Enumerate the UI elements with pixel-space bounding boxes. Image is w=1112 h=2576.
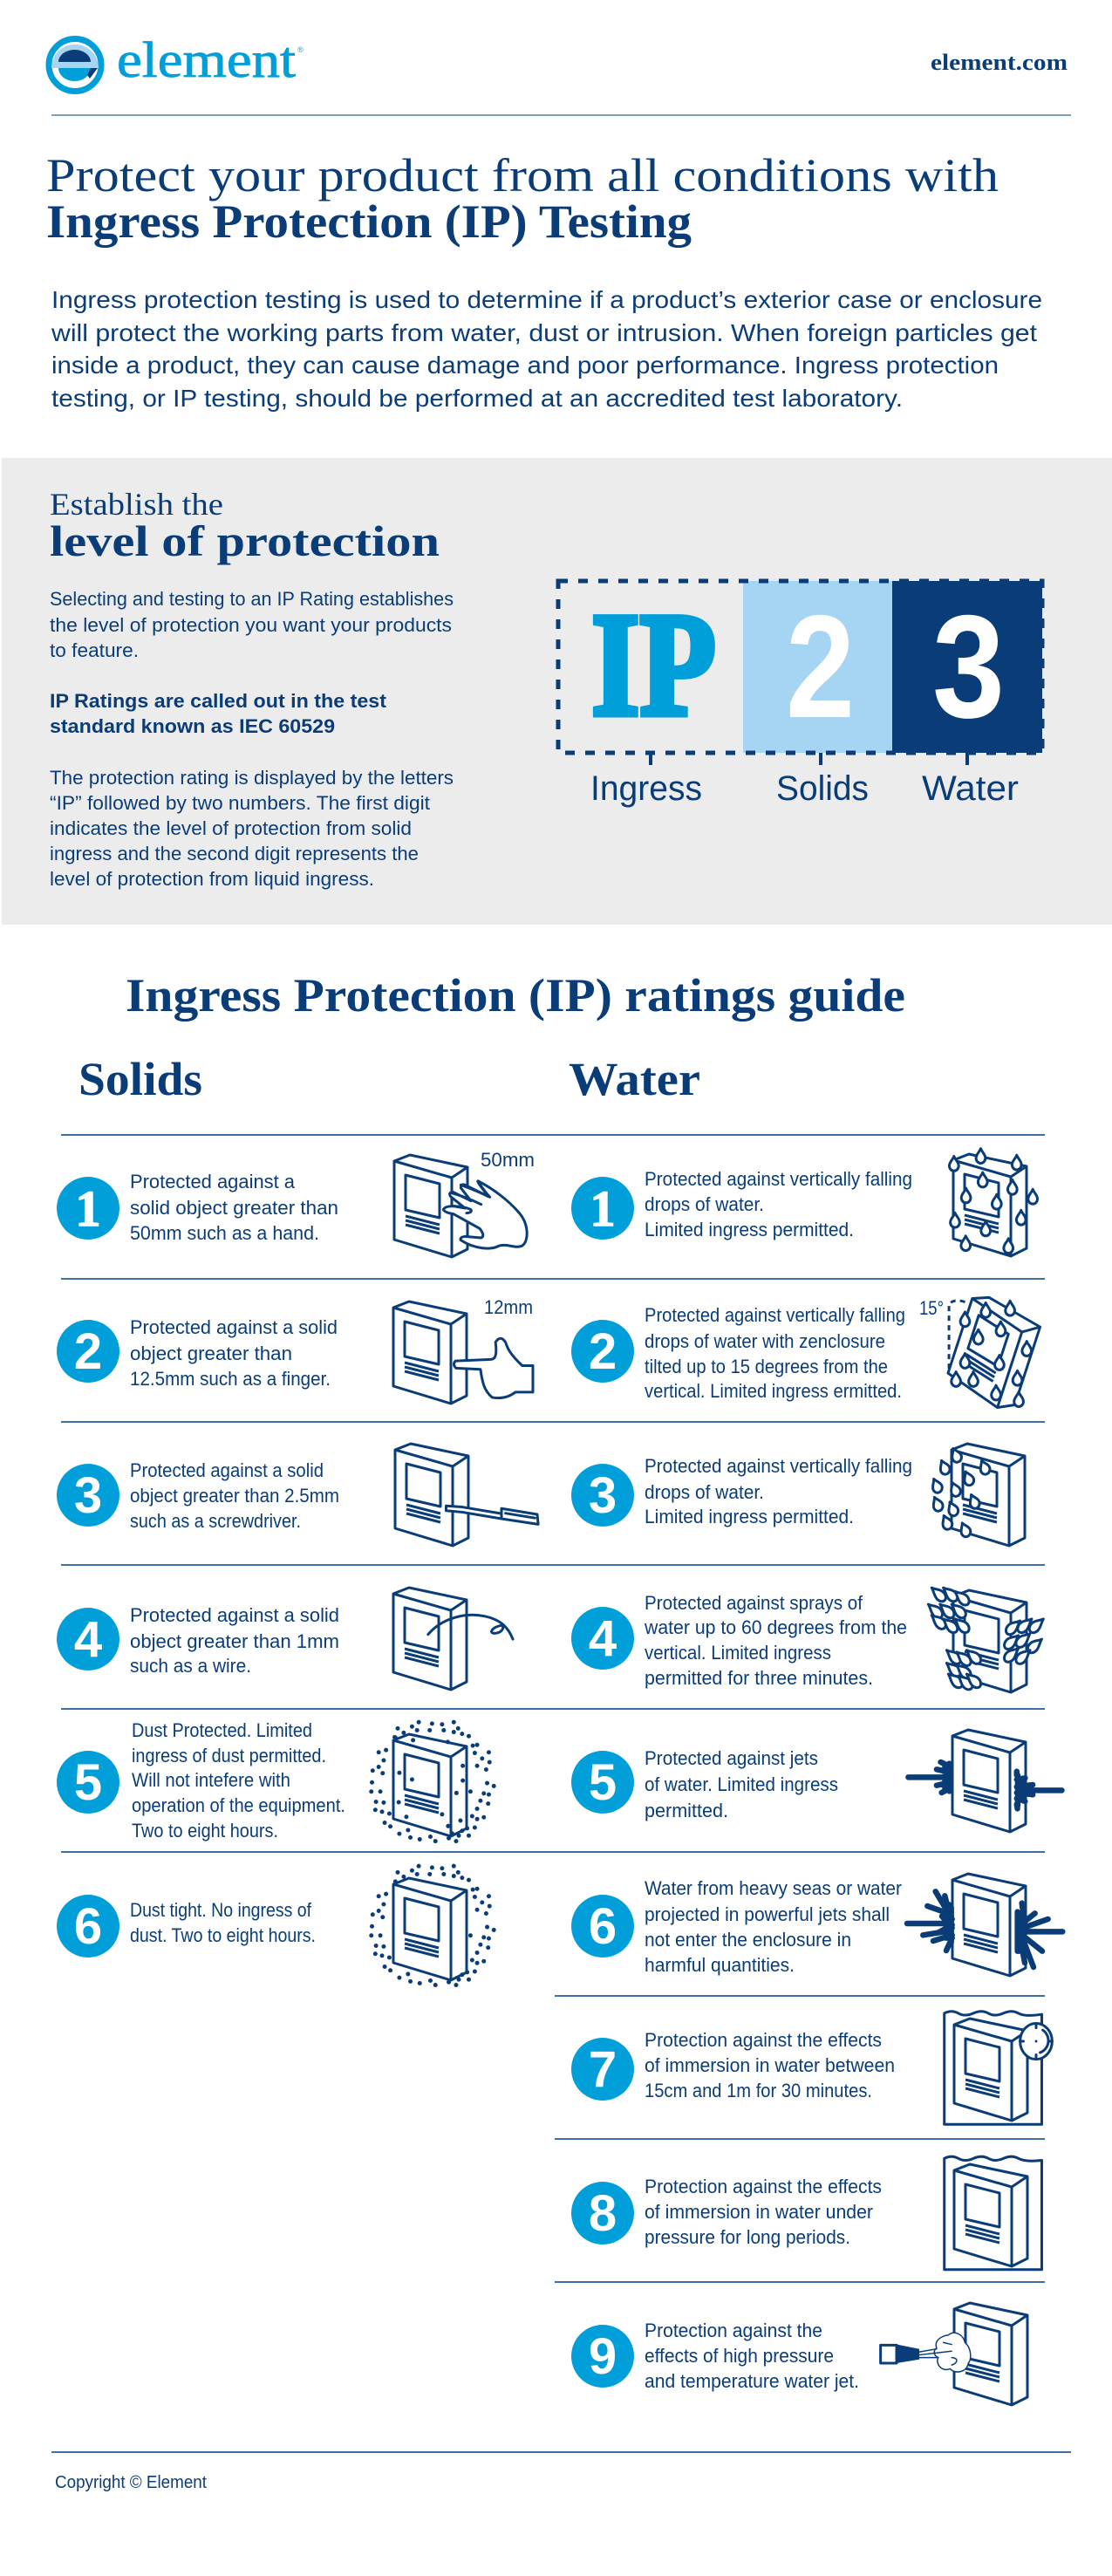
panel text: selecting bbox=[50, 588, 454, 661]
description: and temperature water jet. bbox=[645, 2370, 859, 2392]
IP23 diagram: IP bbox=[591, 583, 716, 747]
description: harmful quantities. bbox=[645, 1954, 795, 1976]
badge 9: 9 bbox=[589, 2328, 617, 2385]
description: Protection against the bbox=[645, 2320, 822, 2341]
description bbox=[130, 1604, 339, 1677]
badge 3: 3 bbox=[589, 1467, 617, 1524]
description bbox=[645, 1304, 905, 1402]
description: drops of water with zenclosure bbox=[645, 1330, 885, 1352]
description: object greater than 2.5mm bbox=[130, 1485, 339, 1507]
solids row 4 bbox=[57, 1588, 513, 1690]
water row 7 bbox=[571, 2012, 1052, 2124]
description bbox=[644, 1592, 907, 1689]
description: solid object greater than bbox=[130, 1197, 338, 1219]
panel text: rating explanation: indicates the level of protection from solid bbox=[50, 817, 412, 839]
copyright footer: Copyright © Element bbox=[55, 2473, 207, 2492]
title: Ingress Protection (IP) Testing bbox=[46, 195, 692, 248]
description: Limited ingress permitted. bbox=[645, 1219, 854, 1240]
icon: dust around box bbox=[372, 1866, 494, 1985]
solids row 3 bbox=[57, 1444, 538, 1546]
badge 2: 2 bbox=[589, 1323, 617, 1380]
description bbox=[645, 1877, 902, 1976]
panel text: rating explanation: level of protection from liquid ingress. bbox=[50, 868, 374, 890]
icon: powerful water jets bbox=[907, 1874, 1062, 1976]
badge 1 bbox=[57, 1177, 119, 1240]
description: Protected against a solid bbox=[130, 1459, 324, 1481]
badge 8: 8 bbox=[589, 2185, 617, 2242]
description: Protected against a solid bbox=[130, 1604, 339, 1626]
description: such as a screwdriver. bbox=[130, 1510, 301, 1532]
description bbox=[645, 1168, 912, 1240]
description: Protected against vertically falling bbox=[645, 1168, 912, 1190]
badge 4: 4 bbox=[74, 1611, 102, 1668]
icon: finger pointing at box: 12mm bbox=[484, 1296, 533, 1318]
solids row 5 bbox=[57, 1719, 494, 1841]
badge 3 bbox=[571, 1464, 634, 1527]
description bbox=[645, 1455, 912, 1527]
intro paragraph: will protect the working parts from water, dust or intrusion. When foreign particles get bbox=[51, 319, 1037, 346]
description bbox=[130, 1459, 339, 1532]
description: object greater than bbox=[130, 1343, 292, 1364]
description bbox=[132, 1719, 345, 1841]
panel text: selecting: the level of protection you want your products bbox=[50, 614, 452, 636]
panel heading bbox=[50, 487, 440, 565]
icon: hand reaching box: 50mm bbox=[481, 1149, 535, 1171]
header logo: ® bbox=[297, 45, 304, 54]
badge 2 bbox=[571, 1320, 634, 1383]
panel text: rating explanation bbox=[50, 767, 454, 890]
water heading: Water bbox=[569, 1053, 700, 1105]
description: Protected against sprays of bbox=[645, 1592, 863, 1614]
badge 5 bbox=[57, 1751, 119, 1814]
intro paragraph: Ingress protection testing is used to determine if a product’s exterior case or enclosure bbox=[51, 286, 1042, 313]
description: operation of the equipment. bbox=[132, 1794, 345, 1816]
header logo: element bbox=[117, 31, 296, 88]
description: Protected against vertically falling bbox=[645, 1304, 905, 1326]
description: Protected against a bbox=[130, 1171, 296, 1192]
badge 6: 6 bbox=[74, 1898, 102, 1955]
badge 5: 5 bbox=[589, 1754, 617, 1811]
icon: hand reaching box bbox=[394, 1149, 535, 1257]
IP23 diagram bbox=[558, 581, 1042, 808]
water row 9 bbox=[571, 2303, 1027, 2405]
badge 4 bbox=[571, 1607, 634, 1670]
header logo bbox=[49, 31, 304, 91]
badge 8 bbox=[571, 2182, 634, 2245]
icon: water sprays bbox=[925, 1584, 1047, 1692]
panel heading: Establish the bbox=[50, 487, 223, 522]
description: Protected against jets bbox=[645, 1747, 818, 1769]
badge 6: 6 bbox=[589, 1898, 617, 1955]
description bbox=[645, 2176, 882, 2248]
solids row 1 bbox=[57, 1149, 535, 1257]
description: effects of high pressure bbox=[645, 2345, 834, 2367]
panel text: selecting: to feature. bbox=[50, 639, 139, 661]
description bbox=[645, 1747, 838, 1821]
icon: immersion with timer bbox=[945, 2012, 1052, 2124]
guide heading: Ingress Protection (IP) ratings guide bbox=[126, 969, 905, 1022]
water row 6 bbox=[571, 1874, 1062, 1976]
badge 6 bbox=[571, 1895, 634, 1958]
description: Protected against vertically falling bbox=[645, 1455, 912, 1477]
panel text: rating explanation: ingress and the second digit represents the bbox=[50, 843, 419, 864]
description bbox=[130, 1316, 338, 1390]
description: of immersion in water between bbox=[645, 2054, 895, 2076]
description: water up to 60 degrees from the bbox=[644, 1616, 907, 1638]
IP23 diagram: Water bbox=[922, 769, 1019, 808]
panel: level of protection bbox=[2, 458, 1112, 925]
icon: dust around and inside box bbox=[372, 1722, 494, 1841]
description: permitted. bbox=[645, 1800, 728, 1821]
solids row 6 bbox=[57, 1866, 494, 1985]
icon: screwdriver bbox=[395, 1444, 538, 1546]
description: dust. Two to eight hours. bbox=[130, 1924, 316, 1946]
icon: water jets bbox=[908, 1730, 1061, 1832]
IP23 diagram: Solids bbox=[776, 769, 869, 808]
description bbox=[130, 1171, 338, 1244]
water row 4 bbox=[571, 1584, 1047, 1692]
description: drops of water. bbox=[645, 1193, 764, 1215]
badge 4 bbox=[57, 1608, 119, 1671]
badge 2: 2 bbox=[74, 1323, 102, 1380]
icon: wire bbox=[393, 1588, 513, 1690]
badge 1 bbox=[571, 1177, 634, 1240]
description: Protection against the effects bbox=[645, 2029, 882, 2051]
title bbox=[46, 149, 999, 248]
water row 2 bbox=[571, 1293, 1044, 1412]
description: ingress of dust permitted. bbox=[132, 1745, 326, 1766]
icon: tilted box with drops: 15° bbox=[919, 1297, 944, 1319]
description: Dust Protected. Limited bbox=[132, 1719, 312, 1741]
description: not enter the enclosure in bbox=[645, 1929, 851, 1951]
icon: angled drops bbox=[930, 1444, 1025, 1546]
description: drops of water. bbox=[645, 1481, 764, 1503]
website address: element.com bbox=[931, 50, 1068, 75]
icon: finger pointing at box bbox=[393, 1296, 533, 1404]
description: 50mm such as a hand. bbox=[130, 1222, 319, 1244]
intro paragraph: inside a product, they can cause damage and poor performance. Ingress protection bbox=[51, 352, 999, 379]
water row 8 bbox=[571, 2156, 1041, 2270]
panel text: standard callout bbox=[50, 690, 387, 737]
icon: high pressure nozzle bbox=[881, 2303, 1027, 2405]
solids heading: Solids bbox=[78, 1053, 202, 1105]
badge 9 bbox=[571, 2325, 634, 2388]
description bbox=[645, 2029, 895, 2101]
water row 5 bbox=[571, 1730, 1061, 1832]
badge 6 bbox=[57, 1895, 119, 1958]
badge 2 bbox=[57, 1320, 119, 1383]
description: vertical. Limited ingress ermitted. bbox=[645, 1380, 902, 1402]
badge 1: 1 bbox=[75, 1180, 101, 1237]
panel text: rating explanation: “IP” followed by two numbers. The first digit bbox=[50, 792, 430, 814]
IP23 diagram: 3 bbox=[932, 584, 1005, 748]
badge 5 bbox=[571, 1751, 634, 1814]
description: of water. Limited ingress bbox=[645, 1773, 838, 1795]
panel text: standard callout: standard known as IEC 60529 bbox=[50, 715, 335, 737]
badge 4: 4 bbox=[589, 1610, 617, 1667]
description: 15cm and 1m for 30 minutes. bbox=[645, 2080, 872, 2101]
description: vertical. Limited ingress bbox=[645, 1642, 831, 1664]
badge 3: 3 bbox=[74, 1467, 102, 1524]
water row 1 bbox=[571, 1149, 1038, 1256]
badge 7 bbox=[571, 2038, 634, 2101]
panel text: rating explanation: The protection rating is displayed by the letters bbox=[50, 767, 454, 789]
panel heading: level of protection bbox=[50, 516, 440, 565]
description: Dust tight. No ingress of bbox=[130, 1899, 312, 1921]
description: tilted up to 15 degrees from the bbox=[645, 1356, 888, 1377]
icon: falling drops bbox=[949, 1149, 1038, 1256]
IP23 diagram: 2 bbox=[786, 584, 855, 748]
IP23 diagram: Ingress bbox=[590, 769, 702, 808]
description: Will not intefere with bbox=[132, 1769, 290, 1791]
description: Protected against a solid bbox=[130, 1316, 338, 1338]
description: object greater than 1mm bbox=[130, 1630, 339, 1652]
badge 1: 1 bbox=[590, 1180, 616, 1237]
description: Limited ingress permitted. bbox=[645, 1506, 854, 1527]
description: such as a wire. bbox=[130, 1655, 251, 1677]
panel text: standard callout: IP Ratings are called out in the test bbox=[50, 690, 387, 712]
badge 3 bbox=[57, 1464, 119, 1527]
water row 3 bbox=[571, 1444, 1025, 1546]
description bbox=[130, 1899, 316, 1946]
description: Water from heavy seas or water bbox=[645, 1877, 902, 1899]
icon: tilted box with drops bbox=[919, 1293, 1044, 1412]
description: Two to eight hours. bbox=[132, 1820, 278, 1841]
intro paragraph bbox=[51, 286, 1042, 412]
description: Protection against the effects bbox=[645, 2176, 882, 2197]
description: projected in powerful jets shall bbox=[645, 1903, 890, 1925]
description: pressure for long periods. bbox=[645, 2226, 850, 2248]
icon: immersion under pressure bbox=[945, 2156, 1041, 2270]
panel text: selecting: Selecting and testing to an IP Rating establishes bbox=[50, 588, 454, 610]
description: of immersion in water under bbox=[645, 2201, 873, 2223]
intro paragraph: testing, or IP testing, should be performed at an accredited test laboratory. bbox=[51, 385, 903, 412]
description: permitted for three minutes. bbox=[645, 1667, 873, 1689]
description: 12.5mm such as a finger. bbox=[130, 1368, 331, 1390]
badge 5: 5 bbox=[74, 1754, 102, 1811]
solids row 2 bbox=[57, 1296, 533, 1404]
badge 7: 7 bbox=[589, 2041, 617, 2098]
description bbox=[645, 2320, 859, 2392]
title: Protect your product from all conditions with bbox=[46, 149, 999, 202]
